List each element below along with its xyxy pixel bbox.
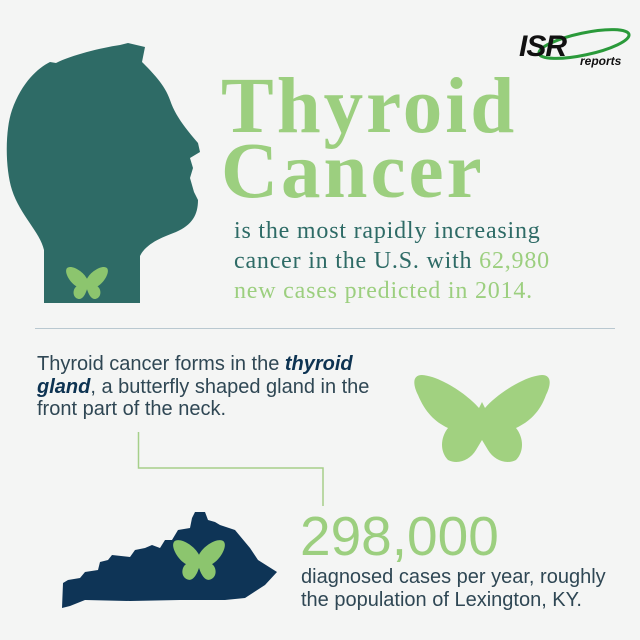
icon: head silhouette	[6, 43, 200, 303]
text block: thyroid gland description: Thyroid cancer forms in the thyroid	[37, 353, 353, 375]
icon: small butterfly on neck	[66, 267, 108, 299]
subtitle text: cancer in the U.S. with 62,980	[234, 248, 550, 274]
logo: ISR reports: reports	[580, 54, 622, 68]
icon: Kentucky map	[62, 512, 277, 608]
subtitle text	[234, 218, 550, 304]
stat description: diagnosed cases per year, roughly	[301, 566, 606, 588]
logo: ISR reports: ISR	[519, 30, 567, 63]
subtitle text: new cases predicted in 2014.	[234, 278, 533, 304]
logo: ISR reports	[519, 28, 630, 68]
title: Thyroid Cancer	[221, 63, 517, 215]
stat description: the population of Lexington, KY.	[301, 589, 582, 611]
stat: 298,000: 298,000	[300, 505, 499, 567]
connector line	[138, 432, 324, 506]
text block: thyroid gland description: front part of the neck.	[37, 398, 226, 420]
title: Thyroid Cancer: Cancer	[221, 128, 485, 215]
text block: thyroid gland description: gland, a butterfly shaped gland in the	[37, 376, 369, 398]
title: Thyroid Cancer: Thyroid	[221, 63, 517, 150]
icon: large butterfly	[414, 375, 550, 462]
stat description	[301, 566, 606, 611]
text block: thyroid gland description	[37, 353, 369, 420]
icon: butterfly on Kentucky	[173, 540, 225, 580]
subtitle text: is the most rapidly increasing	[234, 218, 541, 244]
